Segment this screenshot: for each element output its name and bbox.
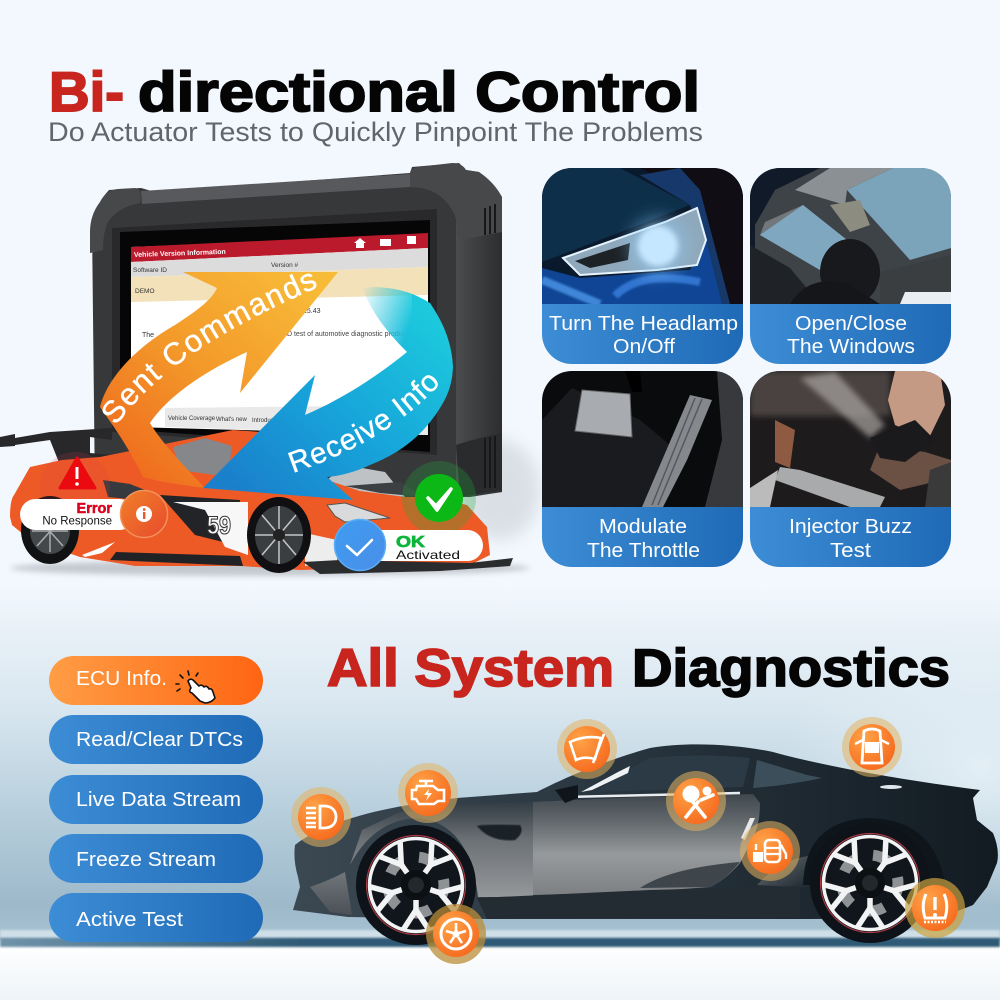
screen text: Introduc: [252, 418, 274, 424]
door panel: [533, 794, 760, 895]
bottom tab bar: [165, 405, 428, 435]
lower right bumper: [456, 433, 502, 497]
fender vent: [477, 825, 522, 840]
chrome belt line: [565, 793, 740, 797]
icon: headlight: [291, 787, 351, 847]
screen text: [133, 249, 412, 424]
door lower shadow: [640, 862, 740, 888]
screen text: The: [142, 332, 154, 339]
label along arrow: Receive Info: [288, 375, 438, 472]
dark grey sports car: [293, 744, 998, 945]
menu button: Live Data Stream: Live Data Stream: [76, 789, 241, 811]
panel: windows card: Open/Close: [795, 312, 907, 335]
side sweep dark: [160, 495, 240, 545]
photo: sunroof: [750, 168, 951, 305]
rear arch: [803, 818, 945, 885]
status: green check: [402, 461, 476, 535]
sill: [477, 886, 800, 919]
photo: headlamp: [542, 168, 743, 304]
icon: brake wheel: [426, 904, 486, 964]
black screen glass: [120, 220, 430, 452]
front bumper grey: [310, 872, 352, 915]
icon: fuel system: [740, 821, 800, 881]
rubber ribs: [485, 204, 495, 488]
tablet shadow: [460, 440, 540, 540]
header buttons: [354, 236, 416, 248]
front white plate: [305, 533, 337, 566]
tan row: [131, 267, 428, 302]
panel: headlamp card: Turn The Headlamp: [549, 312, 738, 335]
arrow: Sent Commands: [100, 272, 338, 488]
headlight: [327, 503, 390, 522]
panel: throttle card: [542, 371, 743, 567]
photo: pedals: [542, 371, 743, 507]
screen: [131, 233, 428, 435]
callout: error no response: Error: [77, 501, 112, 517]
icon: airbag: [666, 771, 726, 831]
car body: [10, 430, 490, 570]
window reflection: [753, 760, 822, 788]
orange sports car: [0, 428, 530, 576]
icon: pointing hand: [176, 671, 215, 703]
screen text: Version #: [271, 262, 298, 269]
panel: windows card: The Windows: [787, 335, 915, 358]
door handle: [741, 818, 755, 840]
icon: car doors: [842, 717, 902, 777]
warning: error triangle: [40, 452, 110, 522]
menu button: Freeze Stream: [49, 834, 263, 883]
panel: injector card: Test: [830, 539, 871, 562]
top highlight band: [141, 174, 410, 204]
icon: tire pressure: [905, 878, 965, 938]
rear wheel: [21, 496, 79, 564]
rear wheel: [810, 823, 930, 943]
menu button: Active Test: [49, 893, 263, 942]
screen text: Vehicle Coverage: [168, 416, 216, 422]
heading: All System Diagnostics: [327, 639, 950, 698]
menu button: Read/Clear DTCs: [49, 715, 263, 764]
side mirror: [555, 785, 578, 803]
tablet body: [92, 163, 502, 497]
panel: injector card: [750, 371, 951, 567]
screen text: ID test of automotive diagnostic products: [285, 331, 412, 338]
menu button: Live Data Stream: [49, 775, 263, 824]
racing number: 59: [207, 512, 231, 540]
lower dark strip: [110, 552, 243, 566]
grey table header: [131, 248, 428, 277]
callout: error no response: [20, 490, 168, 538]
tablet diagnostic device: [90, 163, 540, 540]
background: lower studio gradient: [0, 585, 1000, 1000]
screen text: Software ID: [133, 267, 167, 274]
photo: injector: [750, 371, 951, 507]
heading: All System Diagnostics: All System: [327, 639, 614, 698]
callout: OK activated: [334, 520, 483, 570]
white racing panel: [173, 502, 248, 555]
label: [750, 304, 951, 364]
label along arrow: Sent Commands: [102, 274, 316, 422]
arrow: Receive Info: [203, 287, 453, 500]
callout: error no response: No Response: [42, 516, 112, 528]
callout: OK activated: OK: [396, 534, 426, 551]
front fender: [350, 802, 533, 897]
right side face: [456, 197, 502, 497]
cabin window: [173, 438, 232, 477]
bezel: [112, 209, 437, 455]
screen text: 15.43: [303, 308, 321, 315]
panel: headlamp card: [542, 168, 743, 364]
panel: throttle card: The Throttle: [587, 539, 700, 562]
screen text: What's new: [216, 417, 247, 423]
ground shadow: [10, 560, 530, 576]
red header: [131, 233, 428, 262]
menu button: ECU Info: [49, 656, 263, 705]
label: [542, 507, 743, 567]
side intake: [103, 480, 150, 499]
panel: throttle card: Modulate: [599, 515, 687, 538]
panel: injector card: Injector Buzz: [789, 515, 912, 538]
callout: OK activated: Activated: [396, 548, 460, 562]
menu button: Read/Clear DTCs: Read/Clear DTCs: [76, 729, 243, 751]
subtitle: Do Actuator Tests to Quickly Pinpoint The Problems: [48, 117, 703, 147]
white tail flash: [82, 542, 115, 557]
spoiler and cable: [0, 428, 113, 465]
menu button: Active Test: Active Test: [76, 909, 183, 931]
menu button: ECU Info: ECU Info.: [76, 668, 167, 690]
panel: headlamp card: On/Off: [613, 335, 675, 358]
screen text: DEMO: [135, 288, 154, 295]
heading: All System Diagnostics: Diagnostics: [632, 639, 950, 698]
windshield glint: [581, 766, 630, 792]
panel: windows card: [750, 168, 951, 364]
windshield: [327, 465, 405, 497]
label: [750, 507, 951, 567]
car silhouette: [293, 744, 998, 919]
title: Bi-directional Control: directional Control: [138, 60, 700, 123]
label: [542, 304, 743, 364]
side window: [597, 756, 750, 792]
menu button: Freeze Stream: Freeze Stream: [76, 849, 216, 871]
screen text: Vehicle Version Information: [134, 249, 226, 259]
icon: windshield wiper: [557, 719, 617, 779]
front splitter: [303, 558, 513, 574]
front wheel: [356, 825, 476, 945]
front wheel: [247, 497, 311, 573]
background: light upper area: [0, 0, 1000, 600]
rear fender: [757, 856, 810, 888]
icon: engine: [398, 763, 458, 823]
title: Bi-directional Control: Bi-: [49, 60, 124, 123]
rubber bumpers: [90, 163, 502, 253]
rear light glint: [880, 785, 902, 789]
engine bay glint: [345, 482, 425, 497]
